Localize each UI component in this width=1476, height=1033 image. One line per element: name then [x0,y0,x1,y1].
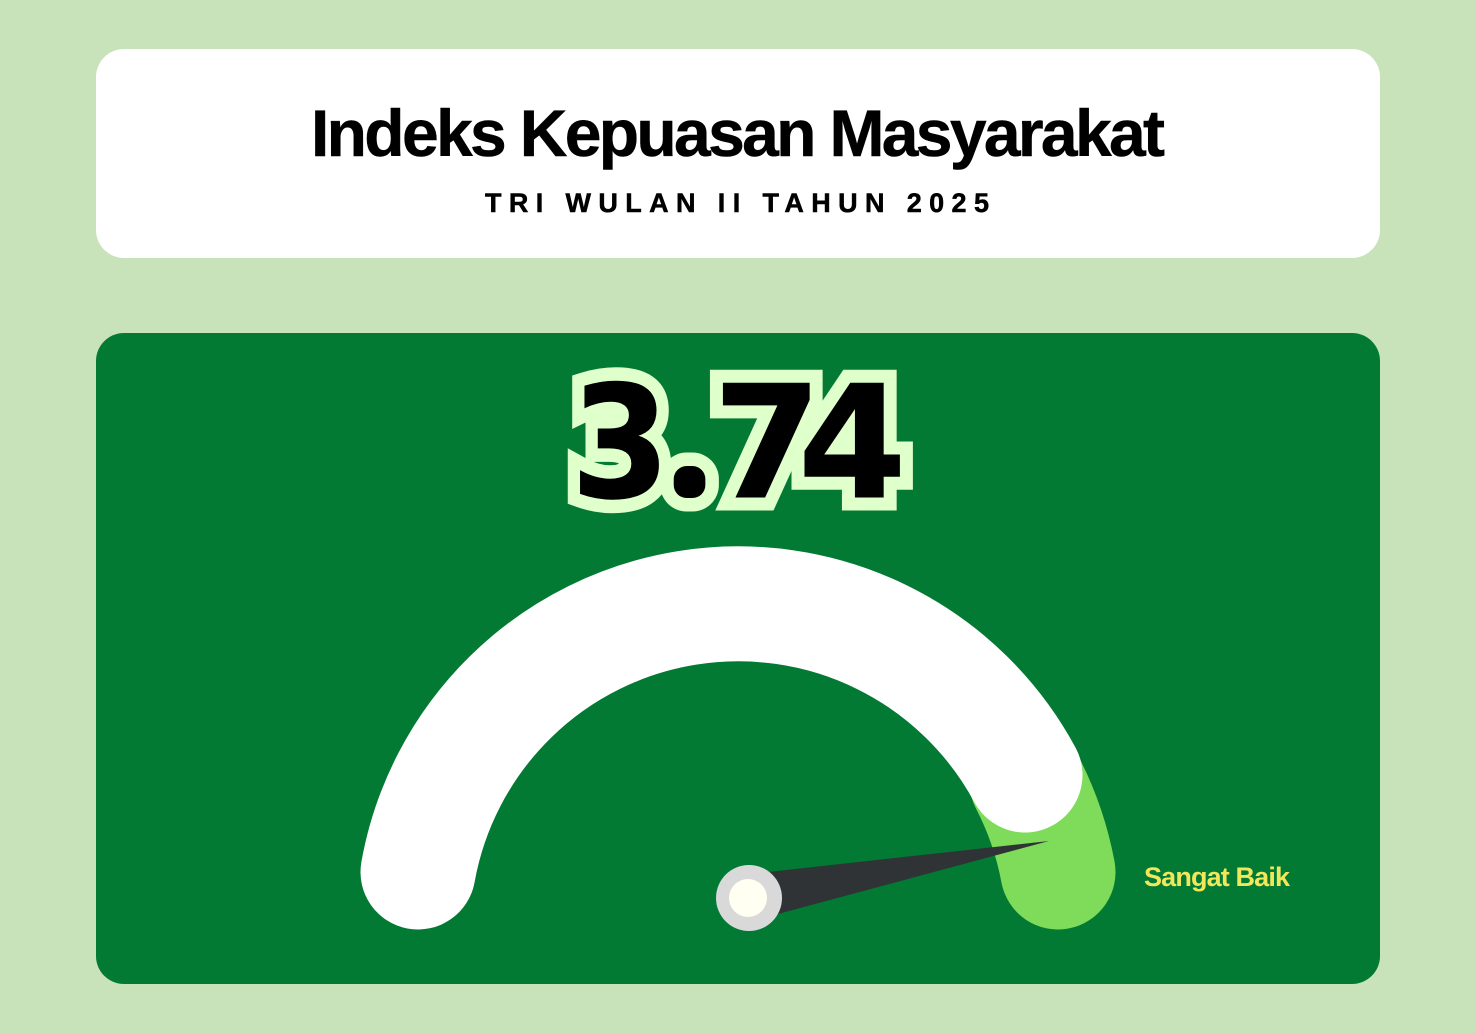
score value: . [684,450,695,494]
title: Indeks Kepuasan Masyarakat [311,96,1165,170]
score value: 3 [571,354,670,535]
subtitle: TRI WULAN II TAHUN 2025 [485,188,989,218]
panel: gauge [96,333,1380,984]
category label: Sangat Baik [1144,862,1291,892]
score value: 74 [713,352,907,534]
score value: . [684,450,695,494]
gauge needle [716,841,1049,931]
score value [571,352,907,535]
score value: 74 [713,352,907,534]
gauge arc: high segment [1027,782,1058,872]
panel: header [96,49,1380,258]
score value: 3 [571,354,670,535]
gauge arc: filled segment [418,604,1025,872]
